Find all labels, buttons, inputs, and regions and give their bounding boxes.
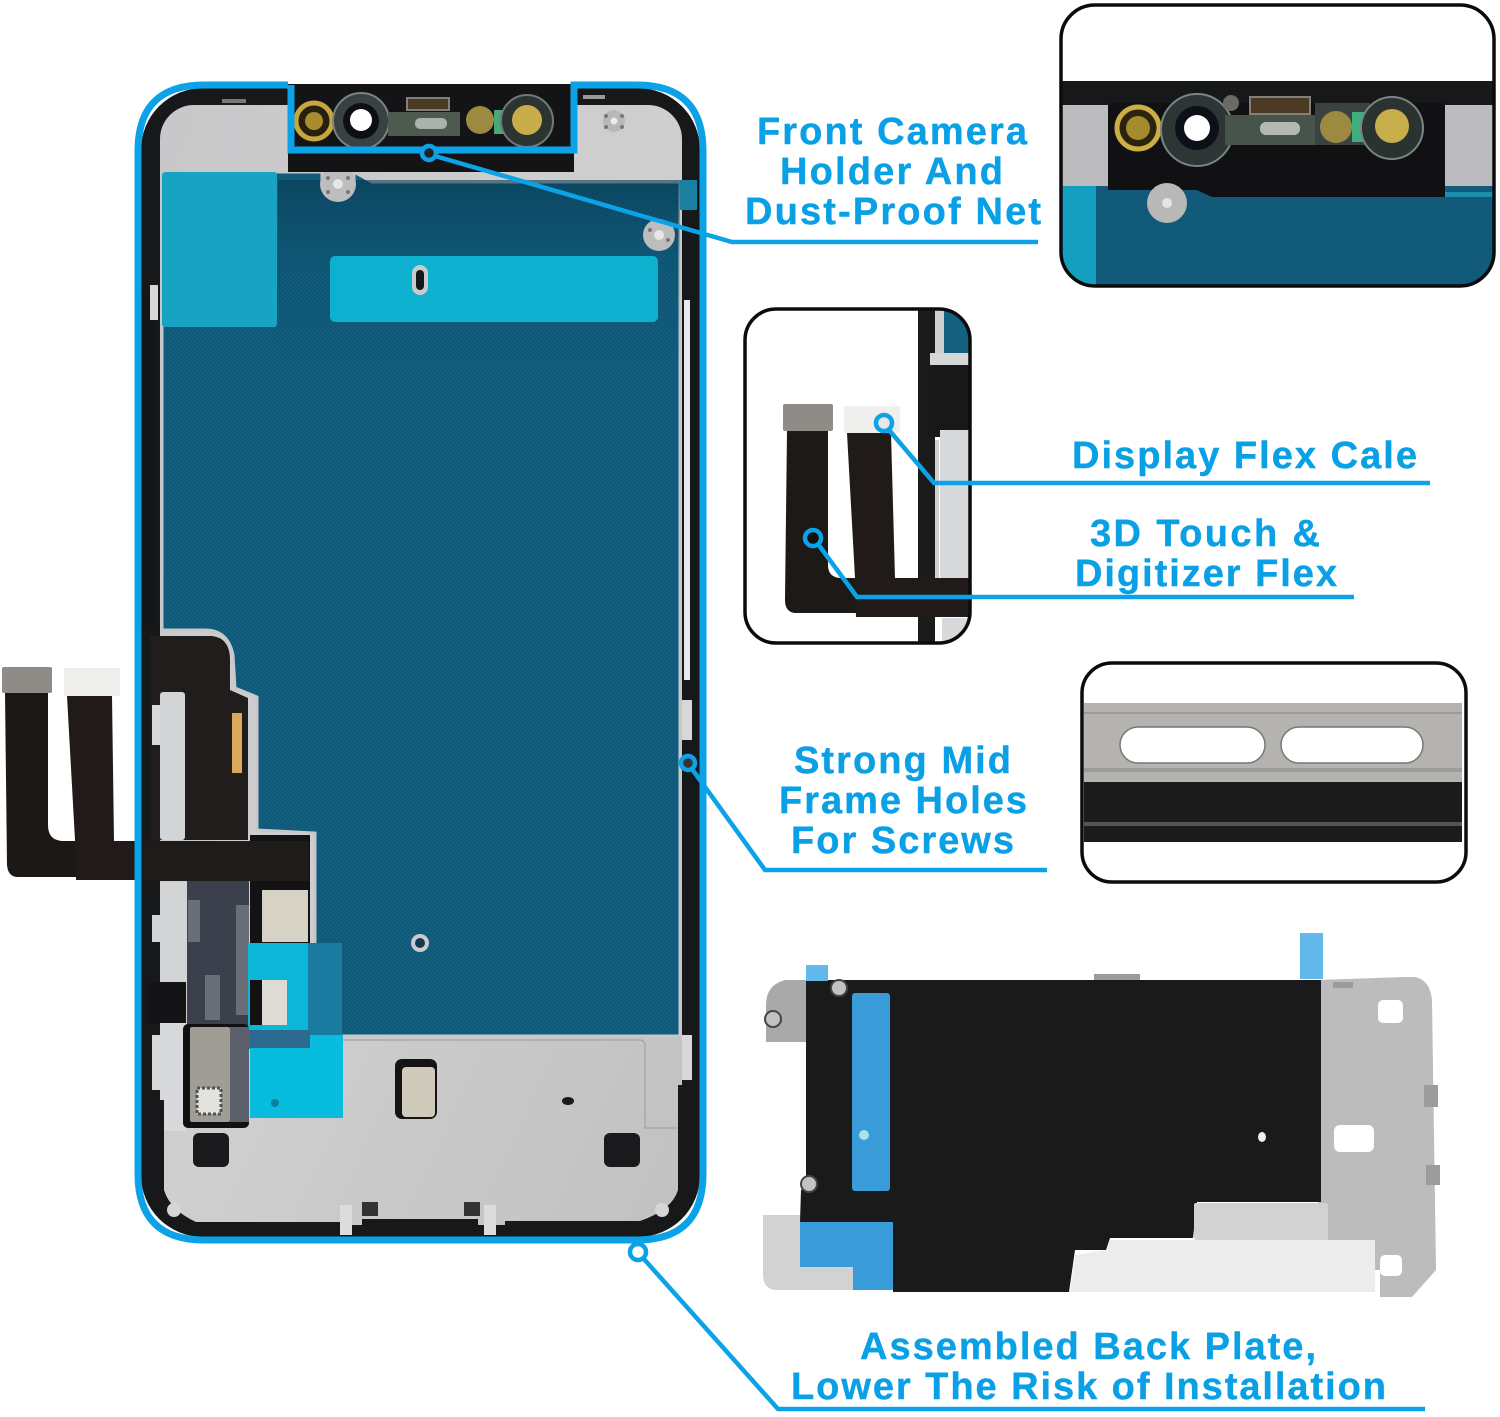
center panel hole	[411, 934, 429, 952]
silver bracket lower	[152, 882, 187, 982]
caption: 3D touch and digitizer flex: 3D Touch &	[1090, 513, 1320, 555]
caption: assembled back plate: Lower The Risk of Installation	[791, 1366, 1386, 1408]
caption: display flex: Display Flex Cale	[1072, 435, 1417, 477]
inset: flex cable close-up	[745, 308, 972, 644]
blue lower sticker	[800, 1222, 893, 1290]
top-left sticker	[162, 172, 277, 327]
inset: front camera close-up	[1061, 5, 1495, 286]
left frame strip	[143, 290, 155, 630]
small plate hole	[562, 1097, 574, 1105]
leader line: display flex	[876, 415, 1430, 483]
back plate left silver pieces	[766, 980, 808, 1042]
top wide sticker	[330, 256, 658, 322]
phone blue outline	[138, 85, 703, 1240]
lower-left black flex	[150, 636, 248, 840]
caption: 3D touch and digitizer flex: Digitizer Flex	[1075, 553, 1337, 595]
blue top tabs	[806, 933, 1323, 981]
bottom black edge	[150, 1085, 692, 1234]
gold contacts	[232, 713, 242, 773]
right frame strip	[684, 300, 690, 680]
bottom left square	[193, 1133, 229, 1167]
caption: strong mid frame holes: Strong Mid	[794, 740, 1011, 782]
caption: front camera holder	[745, 111, 1041, 233]
top right screw	[603, 110, 625, 132]
caption: front camera holder: Front Camera	[757, 111, 1028, 153]
silver mid frame	[160, 105, 682, 1225]
leader line: back plate	[630, 1244, 1425, 1409]
caption: assembled back plate: Assembled Back Plate,	[860, 1326, 1316, 1368]
cyan sticker lower-left	[248, 943, 343, 1118]
right screw tab	[643, 219, 675, 251]
silver bracket bottom-left	[160, 1023, 186, 1131]
silver battery bracket upper	[160, 692, 185, 840]
corner screws	[167, 95, 669, 1217]
inset: mid frame holes close-up	[1082, 663, 1466, 882]
phone black frame	[141, 88, 700, 1237]
leader line: mid frame holes	[681, 756, 1047, 870]
side clips	[1094, 974, 1440, 1185]
sticker slot hole	[412, 265, 428, 295]
caption: assembled back plate	[791, 1326, 1386, 1408]
lower white plate	[1070, 1240, 1375, 1292]
notch black block	[288, 84, 574, 172]
black connector area	[250, 835, 310, 945]
leader line: front camera	[422, 146, 1038, 242]
lower gray plate	[1194, 1203, 1328, 1240]
beige shield square	[262, 890, 308, 942]
top center screw tab	[320, 166, 356, 202]
teal display back panel	[162, 172, 680, 1036]
center sensor window	[395, 1059, 437, 1119]
caption: front camera holder: Dust-Proof Net	[745, 191, 1041, 233]
bottom clips	[340, 1202, 496, 1235]
caption: strong mid frame holes: For Screws	[791, 820, 1014, 862]
panel top shading	[278, 180, 680, 370]
notch camera components	[296, 93, 553, 149]
shield hole	[1258, 1132, 1266, 1142]
blue vertical sticker	[852, 993, 890, 1191]
frame black segment	[148, 982, 186, 1024]
caption: front camera holder: Holder And	[780, 151, 1003, 193]
right frame holes	[1334, 1000, 1403, 1276]
caption: 3D touch and digitizer flex	[1075, 513, 1337, 595]
side clips	[150, 285, 692, 1090]
caption: strong mid frame holes: Frame Holes	[779, 780, 1027, 822]
lower gray region	[187, 880, 249, 1030]
back plate	[763, 933, 1440, 1297]
left detached flex cables	[2, 667, 143, 880]
bottom right square	[604, 1133, 640, 1167]
sticker hole	[859, 1130, 869, 1140]
black shield	[800, 980, 1321, 1292]
phone screen assembly	[138, 84, 703, 1240]
chip sticker	[183, 1024, 249, 1128]
right sticker tabs	[680, 180, 697, 210]
bottom plate edge line	[343, 1040, 683, 1128]
back plate right silver frame	[1318, 977, 1436, 1297]
screws	[765, 980, 847, 1192]
caption: strong mid frame holes	[779, 740, 1027, 862]
leader line: digitizer flex	[805, 530, 1354, 597]
horizontal flex band	[143, 841, 309, 881]
